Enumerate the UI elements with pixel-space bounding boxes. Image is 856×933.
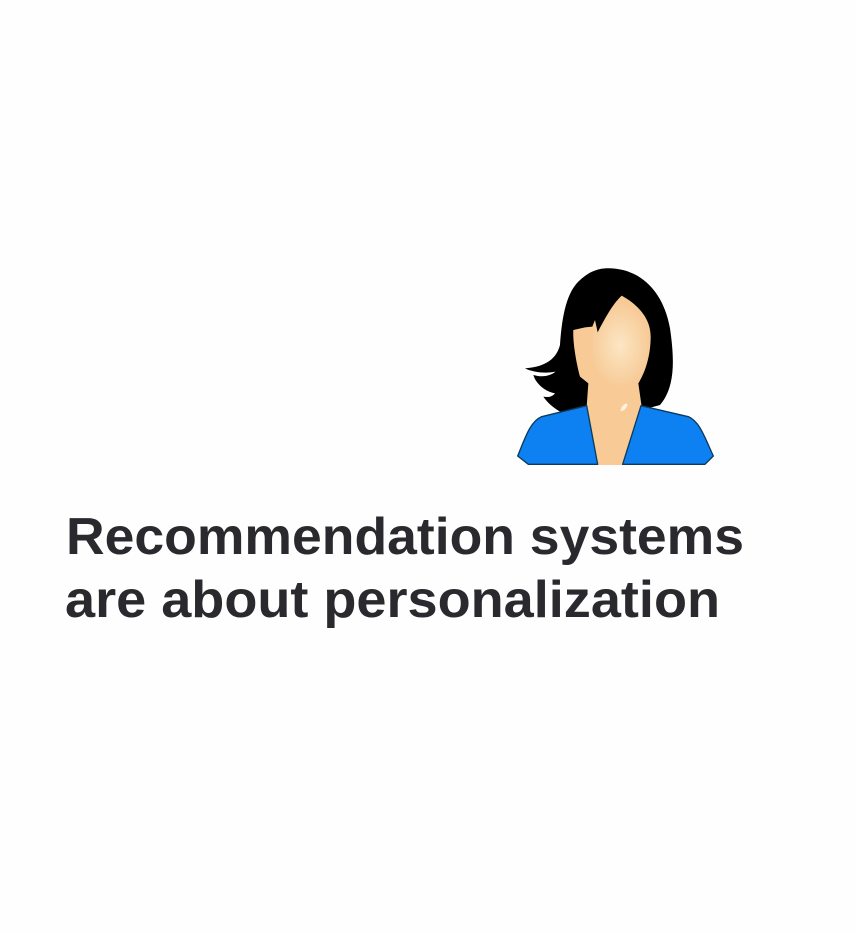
right jacket panel: [623, 406, 713, 464]
icon: woman avatar: [518, 268, 713, 465]
hair: [525, 268, 673, 412]
heading line 2: are about personalization: [65, 571, 720, 629]
left jacket panel: [518, 406, 598, 464]
heading line 1: Recommendation systems: [66, 508, 744, 566]
neck highlight: [619, 402, 629, 412]
face and neck: [573, 296, 651, 465]
heading: [65, 508, 744, 629]
